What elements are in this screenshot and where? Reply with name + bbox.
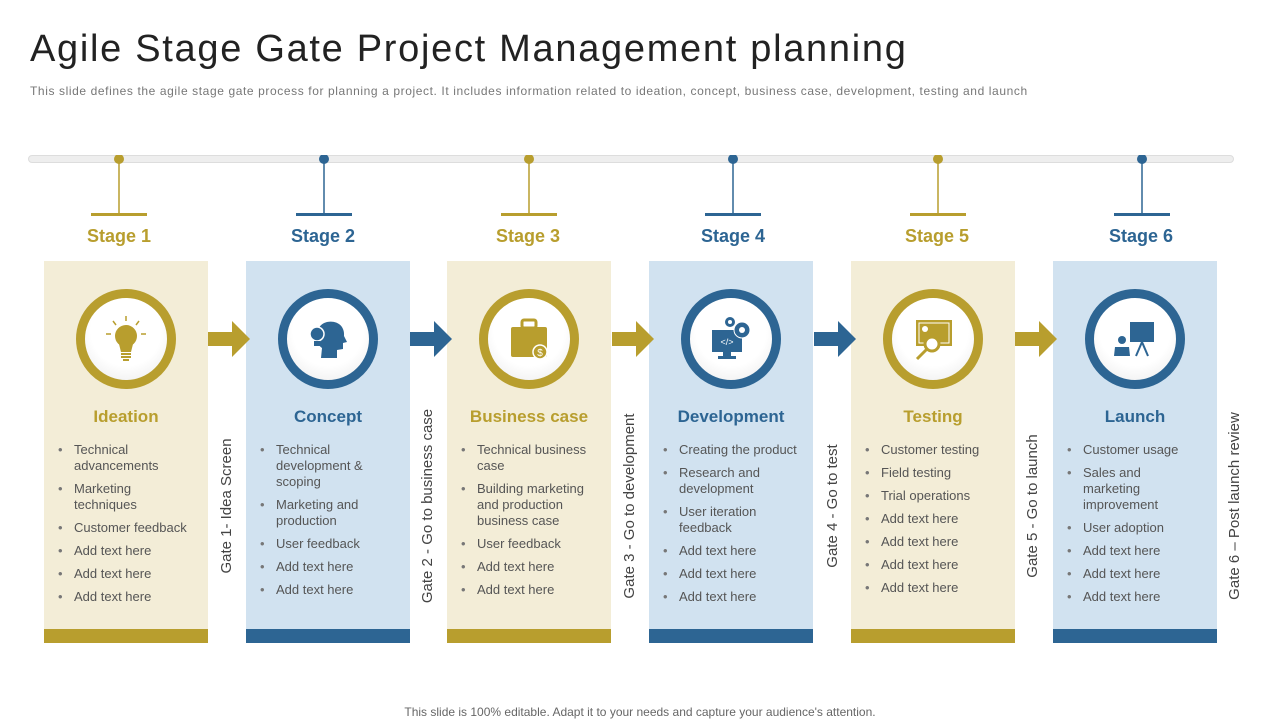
bullet list	[1068, 442, 1178, 604]
stage 5 label: Stage 5	[905, 226, 969, 246]
icon: briefcase: $	[537, 348, 543, 359]
footer: This slide is 100% editable. Adapt it to your needs and capture your audience's attention.	[404, 705, 876, 719]
icon: presenter board	[1085, 289, 1185, 389]
pin: stage 4	[705, 155, 761, 216]
stage 1 label: Stage 1	[87, 226, 151, 246]
bullet list: Add text here	[477, 559, 554, 574]
icon: head with bulb	[278, 289, 378, 389]
panel: concept	[246, 261, 410, 643]
heading: Testing	[903, 407, 963, 426]
bullet list: User feedback	[477, 536, 561, 551]
icon: presentation magnifier	[883, 289, 983, 389]
stage 6 label: Stage 6	[1109, 226, 1173, 246]
gate 3 label: Gate 3 - Go to development	[621, 413, 638, 599]
bullet list: Customer feedback	[74, 520, 187, 535]
heading: Development	[678, 407, 784, 426]
subtitle: This slide defines the agile stage gate process for planning a project. It includes information related to ideation, concept, business case, development, testing and launch	[30, 84, 1028, 98]
bullet list: Technical business case	[477, 442, 586, 473]
bullet list	[260, 442, 363, 597]
arrow 5	[1015, 321, 1057, 357]
timeline bar	[28, 155, 1234, 163]
bullet list: Add text here	[74, 589, 151, 604]
bullet list: Technical development & scoping	[276, 442, 363, 489]
pin: stage 5	[910, 155, 966, 216]
bullet list: Technical advancements	[74, 442, 159, 473]
heading: Launch	[1105, 407, 1165, 426]
bullet list: User adoption	[1083, 520, 1164, 535]
bullet list	[866, 442, 979, 595]
bullet list: Add text here	[1083, 589, 1160, 604]
pin: stage 1	[91, 155, 147, 216]
heading: Ideation	[93, 407, 159, 426]
bullet list	[58, 442, 187, 604]
stage 4 label: Stage 4	[701, 226, 765, 246]
bullet list: Add text here	[881, 580, 958, 595]
bullet list	[664, 442, 797, 604]
stage 2 label: Stage 2	[291, 226, 355, 246]
bullet list: Add text here	[881, 511, 958, 526]
bullet list: Add text here	[276, 559, 353, 574]
bullet list: Customer usage	[1083, 442, 1178, 457]
gate 6 label: Gate 6 – Post launch review	[1226, 412, 1243, 600]
bullet list: Creating the product	[679, 442, 797, 457]
gate 4 label: Gate 4 - Go to test	[824, 444, 841, 568]
arrow 2	[410, 321, 452, 357]
panel: launch	[1053, 261, 1217, 643]
gate 5 label: Gate 5 - Go to launch	[1024, 434, 1041, 578]
pin: stage 2	[296, 155, 352, 216]
gate 1 label: Gate 1- Idea Screen	[218, 438, 235, 574]
gate 2 label: Gate 2 - Go to business case	[419, 409, 436, 603]
arrow 3	[612, 321, 654, 357]
bullet list: Building marketing and production business case	[477, 481, 584, 528]
bullet list: Add text here	[679, 566, 756, 581]
bullet list: Add text here	[1083, 566, 1160, 581]
panel: testing	[851, 261, 1015, 643]
bullet list: Marketing techniques	[74, 481, 137, 512]
panel: development	[649, 261, 813, 643]
panel: ideation	[44, 261, 208, 643]
bullet list: Add text here	[679, 589, 756, 604]
bullet list: Marketing and production	[276, 497, 358, 528]
arrow 4	[814, 321, 856, 357]
bullet list	[462, 442, 586, 597]
bullet list: Add text here	[679, 543, 756, 558]
icon: computer gears: </>	[720, 337, 734, 347]
panel: business case	[447, 261, 611, 643]
icon: briefcase	[479, 289, 579, 389]
bullet list: User iteration feedback	[679, 504, 756, 535]
bullet list: Field testing	[881, 465, 951, 480]
bullet list: Add text here	[276, 582, 353, 597]
bullet list: Add text here	[881, 557, 958, 572]
title: Agile Stage Gate Project Management planning	[30, 28, 908, 70]
bullet list: Add text here	[74, 566, 151, 581]
bullet list: Research and development	[679, 465, 760, 496]
heading: Business case	[470, 407, 588, 426]
heading: Concept	[294, 407, 362, 426]
bullet list: Add text here	[477, 582, 554, 597]
pin: stage 3	[501, 155, 557, 216]
bullet list: Trial operations	[881, 488, 970, 503]
icon: lightbulb brain	[76, 289, 176, 389]
bullet list: Add text here	[74, 543, 151, 558]
bullet list: User feedback	[276, 536, 360, 551]
icon: computer gears	[681, 289, 781, 389]
bullet list: Customer testing	[881, 442, 979, 457]
bullet list: Add text here	[881, 534, 958, 549]
pin: stage 6	[1114, 155, 1170, 216]
bullet list: Sales and marketing improvement	[1083, 465, 1158, 512]
bullet list: Add text here	[1083, 543, 1160, 558]
arrow 1	[208, 321, 250, 357]
stage 3 label: Stage 3	[496, 226, 560, 246]
